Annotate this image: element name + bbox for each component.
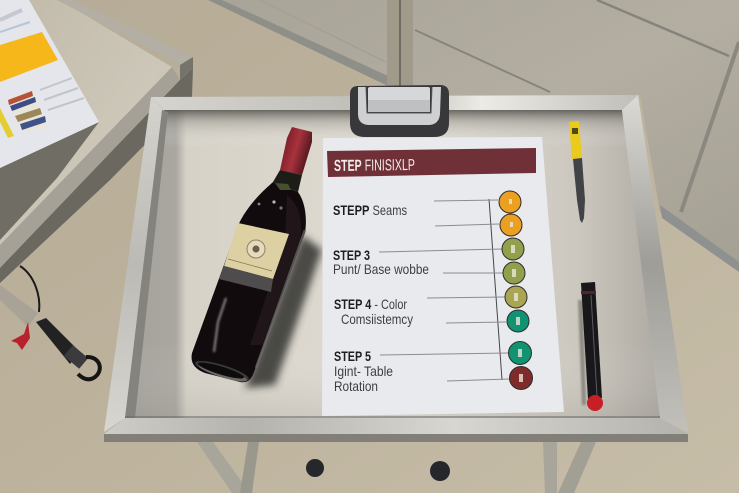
step 4 text: Comsiistemcy: [341, 311, 413, 327]
title bar: [327, 148, 536, 177]
title bar: STEP FINISIXLP: [334, 157, 415, 175]
wine bottle: [192, 127, 322, 388]
step 1 text: STEPP Seams: [333, 202, 407, 218]
tray frame top: [151, 95, 638, 110]
printed sheet: [0, 0, 99, 168]
status badges: [499, 191, 532, 390]
bottle highlights: [272, 200, 276, 204]
step 5 text: Rotation: [334, 378, 378, 394]
black marker: [578, 282, 603, 411]
step 5 text: STEP 5: [334, 348, 371, 364]
background: wall panels: [208, 0, 739, 272]
metal tray: [104, 95, 688, 442]
tray frame left: [104, 97, 164, 432]
table leg and cable: [0, 266, 100, 379]
bottle label: [219, 223, 289, 292]
tray frame bottom: [104, 418, 688, 434]
paper sheet: [322, 137, 564, 416]
handle clip: [350, 85, 449, 137]
step 4 text: [334, 296, 413, 327]
step 3 text: Punt/ Base wobbe: [333, 261, 429, 277]
step 3 text: [333, 247, 429, 277]
yellow pen: [569, 121, 585, 223]
bottle body: [192, 182, 306, 382]
tray frame right: [622, 95, 688, 432]
tray legs and casters: [197, 442, 596, 493]
step 4 text: STEP 4 - Color: [334, 296, 407, 312]
step 3 text: STEP 3: [333, 247, 370, 263]
connector lines: [379, 200, 510, 381]
bottle capsule: [280, 127, 312, 175]
badge glyphs: [509, 199, 523, 382]
timeline spine: [489, 199, 502, 380]
step 5 text: [334, 348, 393, 394]
side table with document: [0, 0, 193, 283]
step 5 text: Igint- Table: [334, 363, 393, 379]
bottle base: [193, 357, 251, 385]
